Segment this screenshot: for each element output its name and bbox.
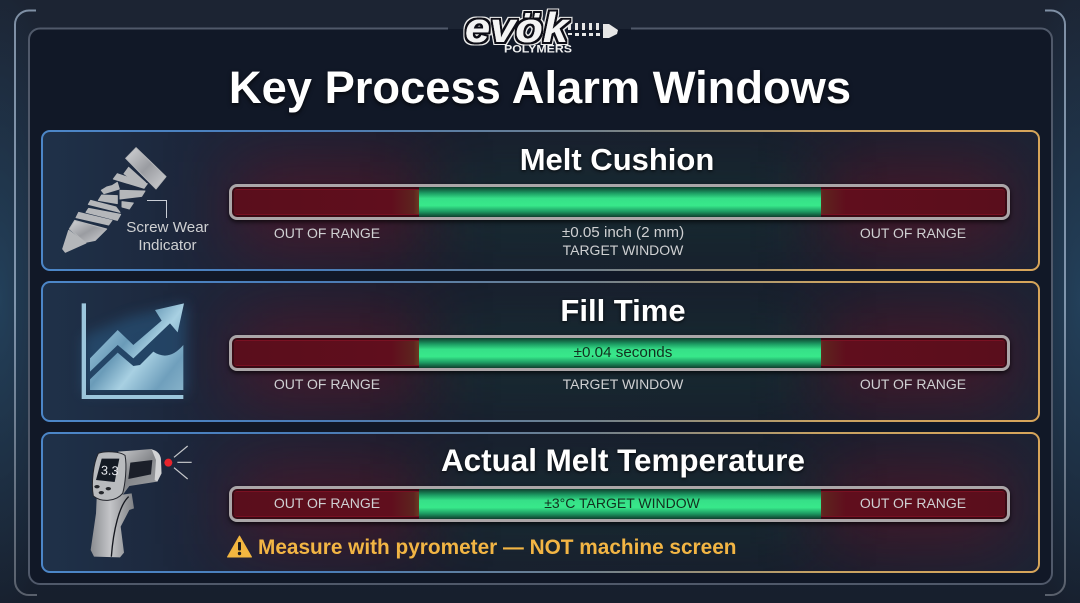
icon: infrared thermometer: 3.3 [101, 463, 119, 478]
title: Key Process Alarm Windows [229, 62, 851, 113]
label: fill time right out of range: OUT OF RANGE [860, 376, 966, 392]
bar: actual melt temperature [229, 486, 1010, 522]
logo subtitle: POLYMERS [504, 44, 572, 56]
icon: worn screw [62, 147, 166, 253]
warning note [227, 536, 736, 559]
label: temperature target window: ±3°C TARGET WINDOW [544, 495, 700, 511]
screw wear indicator callout [126, 200, 209, 254]
label: temperature right out of range: OUT OF RANGE [860, 495, 966, 511]
label: melt cushion target window [562, 224, 684, 258]
panel: actual melt temperature background [41, 432, 1040, 573]
label: fill time target window: TARGET WINDOW [563, 376, 683, 392]
callout text: Indicator [138, 237, 197, 254]
logo screw graphic [568, 23, 618, 38]
bar: fill time [229, 335, 1010, 371]
bar: melt cushion [229, 184, 1010, 220]
callout text [126, 219, 209, 254]
label: temperature left out of range: OUT OF RANGE [274, 495, 380, 511]
icon: warning triangle [227, 536, 252, 558]
label: melt cushion right out of range: OUT OF RANGE [860, 225, 966, 241]
label: fill time value: ±0.04 seconds [574, 344, 672, 361]
warning text: Measure with pyrometer — NOT machine screen [258, 536, 736, 559]
label: fill time left out of range: OUT OF RANGE [274, 376, 380, 392]
panel: melt cushion background [41, 130, 1040, 271]
title: fill time: Fill Time [560, 293, 686, 328]
title: actual melt temperature: Actual Melt Temperature [441, 443, 805, 478]
label: melt cushion target window: ±0.05 inch (2 mm) [562, 224, 684, 241]
callout text: Screw Wear [126, 219, 209, 236]
title: melt cushion: Melt Cushion [520, 142, 714, 177]
panel: fill time background [41, 281, 1040, 422]
logo: evok polymers [463, 4, 618, 56]
logo wordmark: evök [465, 4, 571, 51]
icon: fill time chart [79, 301, 192, 399]
label: melt cushion left out of range: OUT OF RANGE [274, 225, 380, 241]
icon: infrared thermometer [90, 446, 192, 558]
callout bracket [147, 200, 167, 218]
label: melt cushion target window: TARGET WINDOW [563, 242, 683, 258]
